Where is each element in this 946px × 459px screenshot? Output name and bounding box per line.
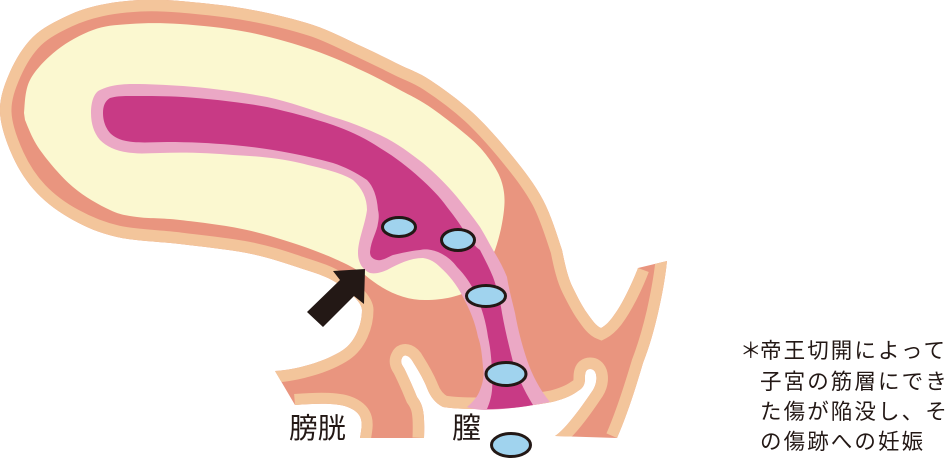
- arrow pointing to scar: [307, 269, 365, 327]
- label: bladder: 膀胱: [289, 413, 346, 445]
- note text: の傷跡への妊娠: [760, 430, 925, 454]
- note text: 子宮の筋層にでき: [760, 370, 946, 394]
- uterine wall: salmon muscle layer: [0, 0, 667, 438]
- uterine wall: peach outer band: [0, 0, 667, 438]
- gestational sac 3: [466, 286, 506, 306]
- gestational sac at scar: [382, 218, 416, 236]
- gestational sac 4: [486, 362, 526, 386]
- uterine cavity: magenta cavity with cervical canal: [103, 96, 533, 409]
- uterine cavity: pink lining: [91, 84, 550, 410]
- uterine interior: cream muscle: [24, 23, 505, 300]
- gestational sac 2: [442, 230, 474, 250]
- note text: 帝王切開によって: [760, 339, 946, 363]
- note text: [740, 339, 946, 454]
- note text: ＊: [740, 339, 764, 363]
- label: vagina: 膣: [452, 412, 481, 445]
- gestational sac 5 below cervix: [492, 434, 530, 456]
- note text: た傷が陥没し、そ: [760, 400, 946, 424]
